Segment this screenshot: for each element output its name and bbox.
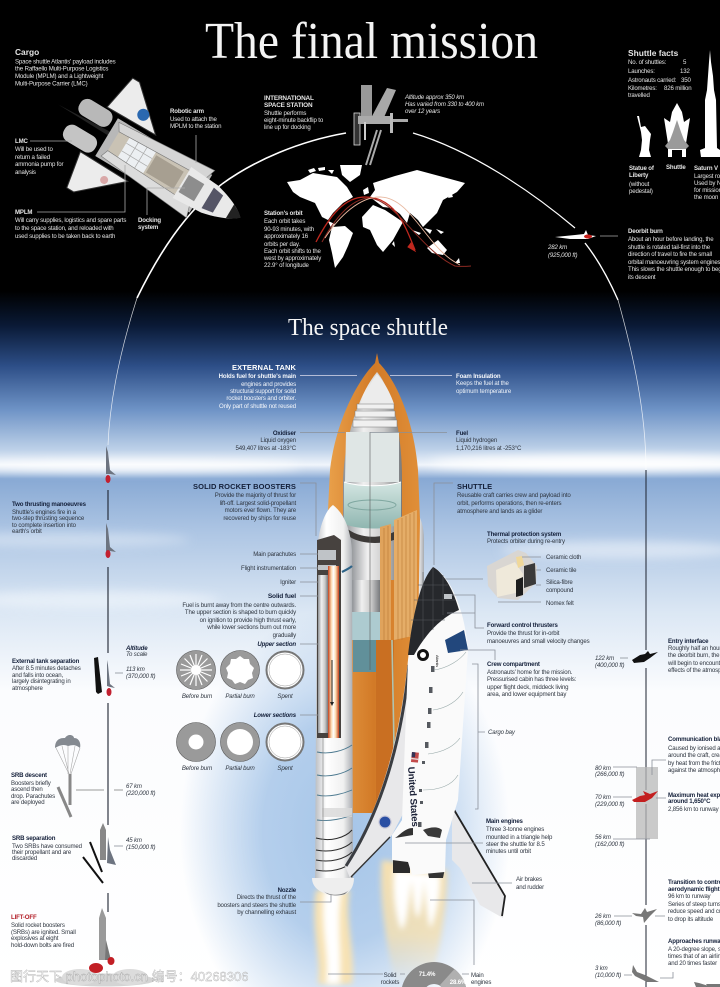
text: fuel: Liquid hydrogen	[456, 437, 497, 444]
text: MPLM	[15, 165, 126, 240]
text: air brakes: and rudder	[516, 884, 544, 891]
panel: shuttle facts	[628, 48, 720, 201]
text: lift-off: hold-down bolts are fired	[11, 942, 74, 949]
icon: shuttle deorbit	[555, 230, 596, 239]
text: robotic arm	[170, 108, 221, 163]
text: nozzle	[217, 887, 331, 916]
text: cargo: Cargo	[15, 47, 39, 57]
text: 3 km	[595, 965, 673, 979]
text: altitude to scale: To scale	[126, 651, 148, 658]
text: forward control thrusters: Provide the thrust for in-orbit	[487, 630, 560, 637]
text: crew compartment: upper flight deck, middeck living	[487, 684, 568, 691]
icon: SRB separation	[83, 823, 123, 883]
text: 26 km	[594, 913, 665, 927]
text: external tank: Holds fuel for shuttle's main	[219, 373, 296, 380]
communication blackout band	[636, 767, 658, 839]
icon: landing shuttle	[694, 982, 720, 987]
text: nozzle: by channelling exhaust	[237, 909, 296, 916]
text: deorbit: shuttle is rotated tail-first into the	[628, 244, 711, 251]
text: thermal heading: Protects orbiter during re-entry	[487, 538, 566, 545]
text: 67 km: 67 km	[126, 783, 142, 790]
text: station's orbit: Each orbit shifts to the	[264, 248, 321, 255]
text: oxidiser: 549,407 litres at -183°C	[236, 445, 297, 452]
text: 45 km: (150,000 ft)	[126, 844, 155, 851]
text: booster parts: Lower sections	[254, 712, 297, 719]
text: ISS heading: SPACE STATION	[264, 102, 313, 109]
icon: tank separation	[94, 657, 123, 696]
text: two thrusting manoeuvres: Shuttle's engines fire in a	[12, 509, 77, 516]
text: booster parts: Solid fuel	[268, 593, 296, 600]
text: SRB separation: their propellant and are	[12, 849, 72, 856]
text: altitude markers: (229,000 ft)	[595, 801, 624, 808]
text: altitude	[404, 94, 484, 115]
flight path arc	[108, 133, 646, 470]
text: deorbit: direction of travel to fire the small	[628, 251, 712, 258]
text: foam insulation	[390, 373, 512, 395]
text: booster parts	[182, 551, 318, 719]
text: booster parts: on ignition to provide high thrust early,	[200, 617, 296, 624]
chart: lower section burn	[176, 722, 304, 772]
text: altitude: Has varied from 330 to 400 km	[405, 101, 484, 108]
text: solid rocket boosters: motors ever flown. They are	[225, 507, 297, 514]
text: SRB descent: drop. Parachutes	[11, 793, 55, 800]
text: facts: 132	[680, 68, 690, 75]
text: external tank separation	[12, 658, 81, 692]
text: altitude markers: 80 km	[595, 765, 611, 772]
icon: saturn V	[700, 50, 720, 157]
text: cargo: the Raffaello Multi-Purpose Logistics	[15, 66, 108, 72]
text: cargo: Space shuttle Atlantis' payload includes	[15, 58, 116, 66]
text: thermal labels: Silica-fibre	[546, 579, 573, 586]
text: nozzle: Nozzle	[278, 887, 297, 894]
panel: external tank labels	[176, 363, 571, 916]
panel: international space station	[264, 85, 484, 165]
text: solid rocket boosters: recovered by ships for reuse	[223, 515, 297, 522]
illustration: shuttle stack	[312, 353, 505, 984]
text: booster parts: Igniter	[280, 579, 296, 586]
text: altitude markers	[595, 760, 666, 848]
text: foam insulation: optimum temperature	[456, 388, 512, 395]
icon: entry shuttle	[632, 651, 658, 663]
text: ISS heading: line up for docking	[264, 124, 311, 131]
panel: thermal protection system	[445, 531, 581, 607]
text: MPLM: used supplies to be taken back to earth	[15, 233, 115, 240]
chart: lower section burn: Partial burn	[225, 765, 255, 772]
text: ISS heading: INTERNATIONAL	[264, 95, 314, 102]
text: external tank separation: atmosphere	[12, 685, 43, 692]
text: external tank: EXTERNAL TANK	[232, 363, 296, 372]
chart: lower section burn: Before burn	[182, 765, 213, 772]
text: lift-off	[11, 914, 76, 949]
chart: upper section burn	[176, 650, 304, 700]
text: station's orbit: Station's orbit	[264, 210, 303, 217]
heading: the space shuttle: The space shuttle	[288, 315, 448, 341]
text: foam insulation: Foam Insulation	[456, 373, 501, 380]
chart: upper section burn: Partial burn	[225, 693, 255, 700]
text: 113 km: 113 km	[126, 666, 145, 673]
chart: thrust pie: 71.4%	[419, 971, 436, 978]
text: 26 km: (86,000 ft)	[595, 920, 621, 927]
text: LMC: ammonia pump for	[15, 161, 64, 168]
text: oxidiser: Oxidiser	[273, 430, 297, 437]
text: external tank: Only part of shuttle not reused	[219, 403, 296, 410]
timeline line	[107, 490, 109, 912]
icon: approach shuttle	[632, 965, 659, 982]
text: thermal labels: compound	[546, 587, 573, 594]
text: forward control thrusters: manoeuvres and small velocity changes	[487, 638, 590, 645]
text: fuel: 1,170,216 litres at -253°C	[456, 445, 522, 452]
text: booster parts: The upper section is shaped to burn quickly	[185, 609, 297, 616]
text: fuel: Fuel	[456, 430, 468, 437]
panel: right timeline	[594, 470, 720, 987]
text: external tank separation: and falls into ocean,	[12, 672, 64, 679]
text: 45 km	[126, 837, 155, 851]
text: thermal heading: Thermal protection system	[487, 531, 562, 538]
text: deorbit: About an hour before landing, the	[628, 236, 714, 243]
text: station's orbit: Each orbit takes	[264, 218, 305, 225]
text: transition: to drop its altitude	[668, 916, 714, 923]
text: crew compartment: Pressurised cabin has three levels:	[487, 676, 577, 683]
text: booster parts: while lower sections burn out more	[206, 624, 297, 631]
text: size captions: (without	[629, 181, 650, 188]
text: maximum heat	[668, 792, 720, 813]
text: MPLM: MPLM	[15, 209, 32, 216]
text: SRB descent: are deployed	[11, 799, 44, 806]
text: cargo: Multi-Purpose Carrier (LMC)	[15, 80, 88, 88]
orbiter: Atlantis	[435, 655, 440, 667]
icon: shuttle stage 2	[106, 523, 116, 558]
icon: space station	[354, 85, 408, 165]
icon: lift-off	[55, 908, 155, 986]
watermark: 图行天下 photophoto.cn 编号：40268306	[10, 969, 248, 984]
text: crew compartment: Astronauts' home for the mission.	[487, 669, 573, 676]
panel: deorbit burn	[547, 228, 720, 281]
text: 122 km	[595, 655, 628, 669]
text: 122 km: (400,000 ft)	[595, 662, 624, 669]
text: air brakes: Air brakes	[516, 876, 542, 883]
text: deorbit: 282 km	[547, 244, 567, 251]
text: thermal labels: Ceramic cloth	[546, 554, 581, 561]
text: booster parts: Fuel is burnt away from the centre outwards.	[182, 602, 296, 609]
text: SRB descent: ascend then	[11, 786, 43, 793]
text: forward control thrusters	[447, 595, 590, 645]
text: docking system: system	[138, 224, 159, 231]
text: 45 km: 45 km	[126, 837, 142, 844]
text: 113 km: (370,000 ft)	[126, 673, 155, 680]
text: external tank separation: After 8.5 minutes detaches	[12, 665, 81, 672]
text: external tank separation: largely disintegrating in	[12, 678, 71, 685]
text: cargo	[15, 47, 116, 88]
text: station's orbit: 90-93 minutes, with	[264, 226, 314, 233]
text: LMC	[15, 138, 72, 176]
text: facts: No. of shuttles:	[628, 59, 667, 66]
text: LMC: Will be used to	[15, 146, 53, 153]
text: thermal labels: Nomex felt	[546, 600, 574, 607]
text: facts	[628, 48, 691, 99]
text: cargo bay	[472, 664, 516, 809]
text: altitude: over 12 years	[405, 108, 440, 115]
text: external tank: engines and provides	[241, 381, 296, 388]
text: shuttle: orbit, performs operations, then re-enters	[457, 500, 562, 507]
text: external tank: structural support for solid	[230, 388, 296, 395]
icon: statue of liberty	[637, 116, 651, 157]
text: robotic arm: Robotic arm	[170, 108, 205, 115]
text: solid rocket boosters: Provide the majority of thrust for	[215, 492, 296, 499]
text: altitude to scale	[125, 645, 148, 658]
text: LMC: analysis	[15, 169, 36, 176]
text: facts: 826 million	[664, 85, 691, 92]
text: main engines	[405, 818, 553, 855]
text: solid rocket boosters: SOLID ROCKET BOOSTERS	[193, 482, 296, 491]
text: station's orbit: approximately 16	[264, 233, 309, 240]
text: lift-off: explosives at eight	[11, 935, 59, 942]
text: robotic arm: Used to attach the	[170, 116, 218, 123]
icon: heat shuttle	[632, 791, 658, 802]
text: main engines: mounted in a triangle help	[486, 834, 553, 841]
text: SRB separation: Two SRBs have consumed	[12, 843, 82, 850]
icon: tile cutaway	[487, 550, 537, 600]
text: cargo bay: Cargo bay	[488, 729, 516, 736]
text: ISS heading	[264, 95, 324, 131]
text: MPLM: Will carry supplies, logistics and spare parts	[15, 217, 126, 224]
text: cargo: Module (MPLM) and a Lightweight	[15, 73, 104, 80]
text: 122 km: 122 km	[595, 655, 614, 662]
text: size captions: Liberty	[629, 172, 649, 179]
text: deorbit: (925,000 ft)	[548, 252, 577, 259]
text: approaches runway	[668, 938, 720, 967]
text: 3 km: 3 km	[595, 965, 608, 972]
text: altitude to scale: Altitude	[125, 645, 148, 652]
text: fuel	[370, 430, 522, 452]
chart: thrust pie: Solid	[384, 972, 396, 979]
text: robotic arm: MPLM to the station	[170, 123, 221, 130]
text: ISS heading: eight-minute backflip to	[264, 117, 324, 124]
text: deorbit: orbital manoeuvring system engines.	[628, 259, 720, 266]
world map with orbit tracks	[287, 165, 471, 268]
text: facts: Kilometres:	[628, 85, 657, 92]
text: deorbit: its descent	[628, 274, 656, 281]
text: shuttle: Reusable craft carries crew and payload into	[457, 492, 571, 499]
text: 3 km: (10,000 ft)	[595, 972, 621, 979]
text: size captions	[629, 164, 720, 201]
chart: upper section burn: Spent	[277, 693, 293, 700]
text: lift-off: LIFT-OFF	[11, 914, 37, 921]
text: facts: 350	[681, 77, 691, 84]
text: main engines: minutes until orbit	[486, 848, 531, 855]
text: docking system	[138, 188, 185, 231]
text: united states: United States	[405, 766, 420, 827]
text: two thrusting manoeuvres: earth's orbit	[12, 528, 42, 535]
text: station's orbit	[263, 210, 322, 269]
text: entry interface	[667, 638, 720, 674]
text: MPLM: to the space station, and reloaded with	[15, 225, 114, 232]
text: altitude markers: 56 km	[595, 834, 611, 841]
text: forward control thrusters: Forward control thrusters	[487, 622, 558, 629]
text: size captions: Saturn V	[694, 165, 719, 172]
text: external tank separation: External tank separation	[12, 658, 80, 665]
text: crew compartment: area, and lower equipment bay	[487, 691, 567, 698]
chart: lower section burn: Spent	[277, 765, 293, 772]
text: air brakes	[472, 876, 544, 891]
text: transition: Series of steep turns	[668, 901, 720, 908]
text: booster parts: Upper section	[257, 641, 296, 648]
chart: upper section burn: Before burn	[182, 693, 213, 700]
icon: shuttle silhouette	[664, 103, 690, 157]
text: approaches runway: and 20 times faster	[668, 960, 717, 967]
text: altitude: Altitude approx 350 km	[404, 94, 464, 101]
text: transition	[668, 879, 720, 923]
text: docking system: Docking	[138, 217, 161, 224]
text: facts: Astronauts carried:	[628, 77, 677, 84]
chart: thrust pie: Main	[471, 972, 484, 979]
text: station's orbit: 22.9° of longitude	[264, 262, 310, 269]
text: lift-off: Solid rocket boosters	[11, 922, 65, 929]
text: deorbit: Deorbit burn	[628, 228, 663, 235]
text: maximum heat: around 1,650°C	[668, 798, 711, 805]
text: two thrusting manoeuvres: two-step thrusting sequence	[12, 515, 85, 522]
text: booster parts: Main parachutes	[253, 551, 296, 558]
text: size captions: Statue of	[629, 165, 655, 172]
text: altitude markers: 70 km	[595, 794, 611, 801]
panel: cargo shuttle	[15, 47, 273, 272]
orbiter	[345, 567, 505, 918]
text: SRB separation: SRB separation	[12, 835, 56, 842]
text: transition: 96 km to runway	[668, 893, 712, 900]
text: oxidiser	[236, 430, 345, 452]
chart: thrust pie: engines	[471, 979, 491, 986]
text: external tank: rocket boosters and orbiter.	[226, 395, 296, 402]
text: facts: 5	[683, 59, 687, 66]
text: main engines: Main engines	[486, 818, 524, 825]
icon: transition shuttle	[632, 908, 657, 923]
text: 26 km: 26 km	[594, 913, 611, 920]
text: main engines: steer the shuttle for 8.5	[486, 841, 545, 848]
text: 67 km	[126, 783, 155, 797]
panel: left timeline	[11, 446, 155, 986]
text: facts: Launches:	[628, 68, 655, 75]
text: facts: Shuttle facts	[628, 48, 679, 58]
text: 67 km: (220,000 ft)	[126, 790, 155, 797]
chart: thrust pie: rockets	[381, 979, 399, 986]
text: size captions: the moon	[694, 194, 718, 201]
text: solid rocket boosters	[193, 482, 316, 536]
text: external tank	[219, 363, 357, 410]
timeline line	[645, 470, 647, 987]
text: altitude markers: (162,000 ft)	[595, 841, 624, 848]
text: LMC: LMC	[15, 138, 28, 145]
flames	[314, 860, 447, 984]
text: transition: aerodynamic flight	[668, 886, 720, 893]
text: lift-off: (SRBs) are ignited. Small	[11, 929, 76, 936]
text: SRB separation: discarded	[12, 855, 37, 862]
text: SRB separation	[12, 835, 82, 862]
text: two thrusting manoeuvres: to complete insertion into	[12, 522, 77, 529]
text: thermal heading	[487, 531, 566, 545]
text: facts: travelled	[628, 92, 650, 99]
text: maximum heat: 2,856 km to runway	[668, 806, 720, 813]
text: SRB descent	[11, 772, 55, 806]
text: foam insulation: Keeps the fuel at the	[456, 380, 510, 387]
text: station's orbit: orbits per day.	[264, 241, 300, 248]
text: shuttle: SHUTTLE	[457, 482, 492, 491]
text: thermal labels: Ceramic tile	[546, 567, 577, 574]
chart: thrust pie	[328, 900, 491, 987]
title: The final mission	[205, 13, 538, 70]
text: deorbit	[547, 228, 720, 281]
text: entry interface: Entry interface	[668, 638, 709, 645]
text: LMC: return a failed	[15, 154, 50, 161]
text: solid rocket boosters: lift-off. Largest solid-propellant	[220, 500, 296, 507]
left booster	[312, 505, 354, 896]
text: shuttle	[434, 482, 571, 565]
text: two thrusting manoeuvres: Two thrusting manoeuvres	[12, 501, 87, 508]
icon: shuttle top view	[24, 52, 273, 272]
text: ISS heading: Shuttle performs	[264, 110, 306, 117]
text: 113 km	[126, 666, 155, 680]
text: nozzle: Directs the thrust of the	[237, 894, 297, 901]
text: oxidiser: Liquid oxygen	[260, 437, 296, 444]
text: communication blackout	[668, 736, 720, 774]
icon: parachute descent	[55, 735, 123, 817]
text: booster parts: Flight instrumentation	[241, 565, 296, 572]
text: crew compartment	[460, 650, 577, 698]
icon: shuttle stage 1	[106, 446, 116, 483]
text: main engines: Three 3-tonne engines	[486, 826, 544, 833]
text: booster parts: gradually	[273, 632, 297, 639]
text: station's orbit: west by approximately	[263, 255, 322, 262]
text: SRB descent: Boosters briefly	[11, 780, 52, 787]
text: size captions: pedestal)	[629, 188, 653, 195]
text: size captions: Shuttle	[666, 164, 686, 171]
text: two thrusting manoeuvres	[12, 501, 87, 535]
text: SRB descent: SRB descent	[11, 772, 47, 779]
text: altitude markers: (266,000 ft)	[595, 771, 624, 778]
text: crew compartment: Crew compartment	[487, 661, 540, 668]
external tank	[328, 353, 420, 813]
right booster	[402, 506, 424, 640]
text: nozzle: boosters and steers the shuttle	[217, 902, 297, 909]
text: shuttle: atmosphere and lands as a glider	[457, 508, 542, 515]
chart: thrust pie: 28.6%	[450, 979, 467, 986]
text: thermal labels	[498, 554, 581, 607]
